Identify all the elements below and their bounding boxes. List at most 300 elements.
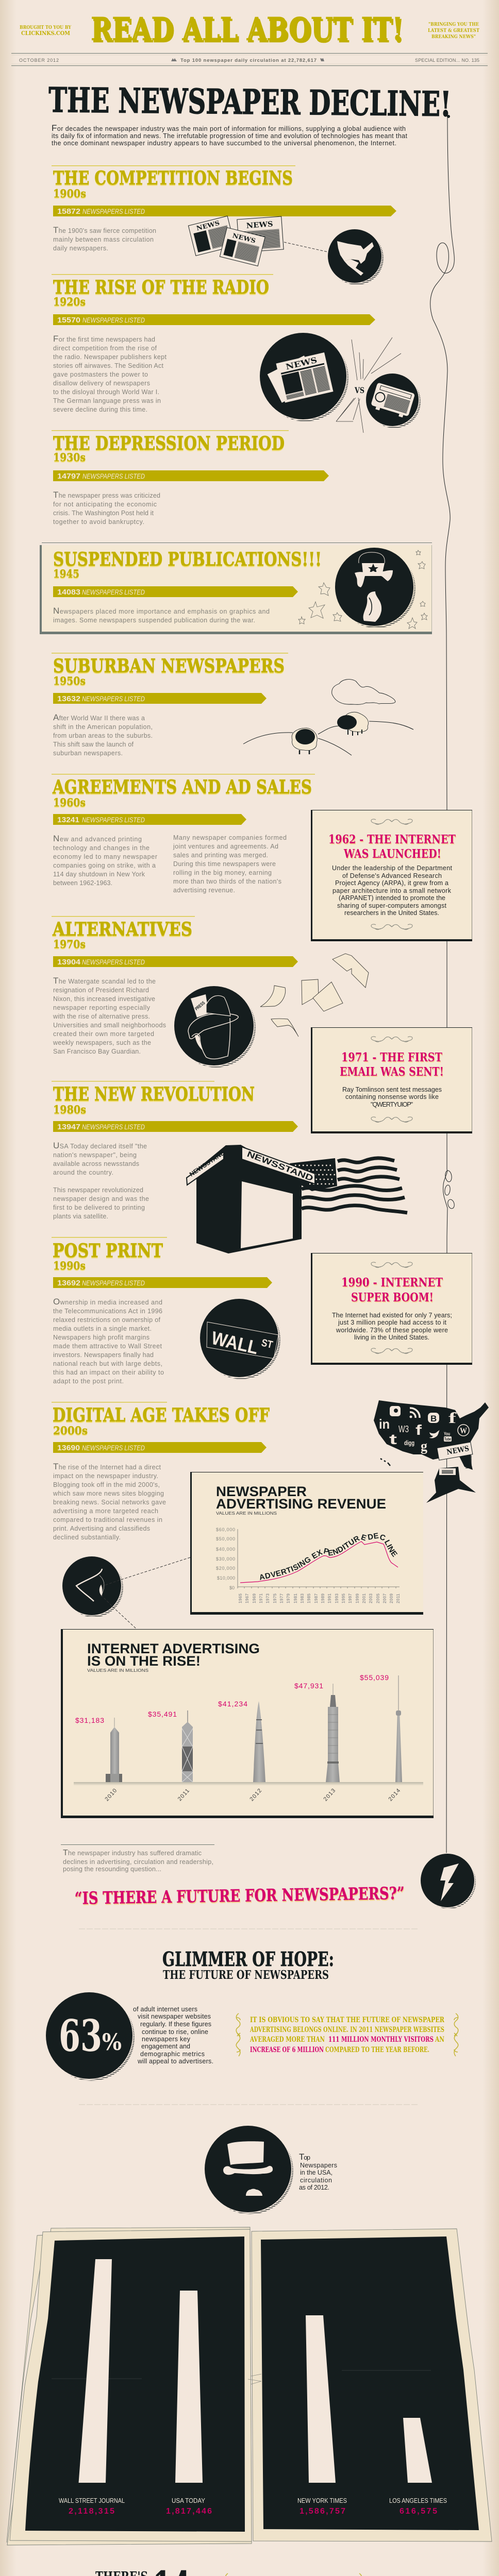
heading — [328, 833, 456, 861]
closing text: declines in advertising, circulation and readership, — [63, 1858, 213, 1866]
text: adult internet users: demographic metrics — [140, 2050, 205, 2058]
body text: declined substantially. — [53, 1534, 121, 1541]
body text: Under the leadership of the Department — [332, 865, 453, 872]
body text: together to avoid bankruptcy. — [53, 518, 144, 526]
section: agreements and ad sales — [52, 774, 315, 894]
brought to you by: BROUGHT TO YOU BY — [20, 25, 71, 30]
icon: newsstand: NEWSSTAND — [188, 1149, 226, 1178]
icon: newspaper circle: NEWS — [285, 355, 318, 371]
date line: OCTOBER 2012 — [19, 58, 59, 63]
count bar: 15872 — [57, 207, 80, 216]
count bar — [53, 956, 298, 967]
body text: resignation of President Richard — [53, 987, 149, 994]
body text: Project Agency (ARPA), it grew from a — [335, 879, 448, 887]
body text — [53, 490, 160, 526]
body text column one: New and advanced printing — [53, 834, 142, 843]
body text: direct competition from the rise of — [53, 345, 157, 352]
icon: usa social media map: W3 — [398, 1424, 409, 1434]
text: adult internet users: engagement and — [141, 2043, 190, 2050]
decade: 1950s — [53, 674, 86, 687]
icon: usa social media map: You — [444, 1431, 450, 1436]
section: digital age takes off — [6, 1400, 492, 2576]
icon: usa social media map: Tube — [444, 1437, 451, 1442]
body text: plants via satellite. — [53, 1213, 108, 1220]
body text: Nixon, this increased investigative — [53, 995, 155, 1003]
heading: DIGITAL AGE TAKES OFF — [53, 1404, 270, 1426]
ornament — [371, 1262, 412, 1267]
icon: reporter circle — [173, 985, 256, 1067]
count bar: NEWSPAPERS LISTED — [82, 1123, 145, 1131]
body text: relaxed restrictions on ownership of — [53, 1316, 161, 1324]
body text: nation's newspaper", being — [53, 1151, 137, 1159]
chart title — [87, 1641, 260, 1673]
icon: wall st circle: WALL — [209, 1327, 260, 1358]
back pages — [7, 2227, 492, 2545]
year labels — [104, 1787, 402, 1803]
count bar: 13947 — [57, 1123, 80, 1131]
icon: uncle sam circle — [334, 547, 415, 628]
line chart: 1967 — [245, 1593, 250, 1603]
body text — [53, 1141, 149, 1220]
icon: wall st circle — [199, 1298, 280, 1379]
question heading: “IS THERE A FUTURE FOR NEWSPAPERS?” — [75, 1883, 405, 1908]
icon: american flag — [290, 1158, 407, 1213]
chart title: VALUES ARE IN MILLIONS — [87, 1668, 148, 1673]
year labels: 2011 — [177, 1787, 191, 1802]
section: alternatives — [52, 916, 369, 1067]
heading: SUBURBAN NEWSPAPERS — [53, 655, 285, 677]
body text: mainly between mass circulation — [53, 236, 154, 243]
body text: newspaper design and was the — [53, 1195, 149, 1202]
right page panel — [261, 2236, 479, 2530]
body text: The 1900's saw fierce competition — [53, 225, 156, 235]
decade: 1980s — [53, 1103, 86, 1116]
body text: The rise of the Internet had a direct — [53, 1462, 161, 1471]
body text: weekly newspapers, such as the — [53, 1039, 151, 1046]
body text: containing nonsense words like — [345, 1093, 439, 1100]
callout: future of advertising: IT IS OBVIOUS TO SAY THAT THE FUTURE OF NEWSPAPER — [250, 2016, 445, 2024]
count bar — [53, 470, 329, 481]
body text: which saw more news sites blogging — [53, 1490, 164, 1497]
line chart: 2005 — [376, 1593, 380, 1603]
body text — [53, 713, 153, 757]
line chart: 2009 — [389, 1593, 394, 1603]
chart title — [216, 1484, 386, 1516]
decade: 1930s — [53, 451, 86, 464]
icon: usa social media map: g — [421, 1438, 427, 1454]
line chart: 1973 — [265, 1593, 270, 1603]
heading: THE NEW REVOLUTION — [53, 1083, 255, 1105]
count bar: 13241 — [57, 816, 79, 824]
body text — [53, 225, 156, 252]
body text: Newspapers placed more importance and emphasis on graphics and — [53, 606, 270, 616]
line chart: 2007 — [382, 1593, 387, 1603]
line chart: 1971 — [259, 1593, 263, 1603]
bar: wall street journal: WALL STREET JOURNAL — [59, 2497, 125, 2504]
icon: cloud — [332, 680, 395, 704]
tower: 2011: $35,491 — [148, 1710, 177, 1718]
panel: suspended publications — [40, 543, 432, 634]
count bar: NEWSPAPERS LISTED — [82, 1279, 145, 1287]
bar: los angeles times — [389, 2418, 447, 2516]
heading: glimmer of hope — [162, 1947, 334, 1982]
callout: number of newspapers — [225, 2573, 362, 2576]
body text — [332, 1312, 452, 1341]
heading: THE RISE OF THE RADIO — [53, 277, 269, 298]
icon: wall st circle: ST — [260, 1337, 274, 1351]
section: the depression period — [52, 430, 329, 526]
body text: disallow delivery of newspapers — [53, 380, 150, 387]
tower: 2013 — [294, 1682, 340, 1782]
body text column one: 114 day shutdown in New York — [53, 871, 145, 878]
heading: 1990 - INTERNET — [341, 1276, 443, 1290]
icon: megaphone circle — [62, 1556, 123, 1617]
section: post print — [52, 1237, 280, 1385]
tower: 2011 — [148, 1710, 193, 1782]
decade: 1900s — [53, 187, 86, 200]
body text: advertising a more targeted reach — [53, 1507, 158, 1515]
count bar: NEWSPAPERS LISTED — [82, 695, 145, 703]
body text: newspaper reporting especially — [53, 1004, 151, 1011]
line chart: 1985 — [307, 1593, 311, 1603]
section: the competition begins — [52, 165, 396, 285]
body text: "QWERTYUIOP" — [371, 1101, 413, 1108]
closing text: The newspaper industry has suffered dramatic — [63, 1849, 202, 1857]
panel: 1990 internet super boom — [311, 1253, 472, 1365]
icon: 63 percent circle: 63 — [59, 2010, 102, 2061]
body text: severe decline during this time. — [53, 406, 147, 413]
text: top newspapers: Newspapers — [300, 2162, 337, 2169]
heading: glimmer of hope: THE FUTURE OF NEWSPAPERS — [163, 1968, 329, 1982]
body text column one: companies going on strike, with a — [53, 862, 156, 869]
icon: flying papers — [260, 954, 369, 1037]
count bar — [53, 314, 375, 325]
line chart: 1995 — [341, 1593, 346, 1603]
body text column one: economy led to many newspaper — [53, 853, 157, 860]
text: top newspapers: circulation — [300, 2177, 332, 2184]
text: adult internet users: continue to rise, online — [142, 2028, 208, 2036]
body text: researchers in the United States. — [344, 909, 439, 917]
icon: usa social media map: in — [379, 1416, 390, 1432]
line chart: $40,000 — [216, 1547, 235, 1552]
text: adult internet users: newspapers key — [142, 2036, 191, 2043]
body text — [53, 1462, 166, 1541]
callout: future of advertising: 111 MILLION MONTHLY VISITORS — [328, 2036, 434, 2044]
body text: San Francisco Bay Guardian. — [53, 1048, 141, 1055]
body text: The Watergate scandal led to the — [53, 976, 156, 986]
heading: 1971 - THE FIRST — [341, 1050, 442, 1064]
bar: los angeles times: LOS ANGELES TIMES — [389, 2497, 447, 2504]
brought to you by: CLICKINKS.COM — [21, 30, 70, 37]
count bar — [53, 586, 298, 597]
count bar: NEWSPAPERS LISTED — [82, 208, 145, 215]
line chart: 1975 — [273, 1593, 277, 1603]
icon: usa social media map: f — [415, 1422, 422, 1438]
body text — [53, 1297, 164, 1385]
ornament — [371, 1348, 412, 1353]
decade: 2000s — [53, 1424, 88, 1437]
body text: living in the United States. — [354, 1334, 429, 1341]
body text: This shift saw the launch of — [53, 741, 134, 748]
body text: shift in the American population, — [53, 723, 153, 731]
bar: new york times: 1,586,757 — [300, 2507, 345, 2516]
count bar — [53, 814, 246, 825]
decade: 1990s — [53, 1259, 86, 1272]
heading: THE DEPRESSION PERIOD — [53, 433, 285, 454]
body text column one — [53, 834, 157, 887]
body text: to the disloyal through World War I. — [53, 388, 159, 396]
icon: usa social media map: t — [389, 1431, 397, 1447]
heading — [341, 1276, 443, 1304]
icon: usa social media map: W — [460, 1427, 467, 1435]
body text: for not anticipating the economic — [53, 501, 157, 508]
panel: 1971 first email — [311, 1027, 472, 1133]
line chart: 1981 — [293, 1593, 298, 1603]
body text: suburban newspapers. — [53, 750, 123, 757]
line chart: 1977 — [279, 1593, 284, 1603]
body text: Ownership in media increased and — [53, 1297, 162, 1307]
line chart: 1983 — [300, 1593, 305, 1603]
line chart: 1989 — [321, 1593, 325, 1603]
intro text: For decades the newspaper industry was the main port of information for millions, supplying a global audience with — [52, 123, 406, 133]
count bar: NEWSPAPERS LISTED — [82, 958, 145, 966]
decade: 1960s — [53, 796, 86, 809]
statistic: 14 percent decline — [95, 2562, 209, 2576]
circulation strip: Top 100 newspaper daily circulation at 22,782,617 — [180, 58, 317, 63]
body text: available across newsstands — [53, 1160, 139, 1167]
icon: lightning circle — [420, 1853, 476, 1909]
edition: SPECIAL EDITION... NO. 135 — [415, 58, 479, 63]
ornament — [371, 1037, 412, 1042]
line chart: 1979 — [286, 1593, 291, 1603]
count bar — [53, 206, 396, 216]
body text column two: advertising revenue. — [173, 887, 235, 894]
bar: usa today: 1,817,446 — [166, 2507, 212, 2516]
heading: ALTERNATIVES — [52, 919, 192, 940]
tower: 2010: $31,183 — [75, 1716, 104, 1724]
body text column one: between 1962-1963. — [53, 879, 112, 887]
body text: media outlets in a single market. — [53, 1325, 152, 1332]
decade: 1920s — [53, 295, 86, 308]
body text: with the rise of alternative press. — [53, 1013, 150, 1020]
body text: print. Advertising and classifieds — [53, 1525, 150, 1532]
masthead title: READ ALL ABOUT IT! — [91, 10, 403, 48]
body text: the Telecommunications Act in 1996 — [53, 1308, 162, 1315]
count bar — [53, 1277, 272, 1288]
icon: reporter circle: PRESS — [194, 1000, 206, 1011]
tower: 2014: $55,039 — [360, 1673, 389, 1682]
line chart: 1965 — [238, 1593, 243, 1603]
body text: investors. Newspapers finally had — [53, 1351, 154, 1359]
line chart: $20,000 — [216, 1566, 235, 1571]
count bar: NEWSPAPERS LISTED — [82, 1444, 145, 1452]
icon: newspaper circle — [259, 332, 348, 421]
count bar: 13904 — [57, 958, 81, 967]
line chart — [216, 1527, 401, 1603]
year labels: 2014 — [387, 1787, 402, 1803]
count bar: NEWSPAPERS LISTED — [82, 316, 145, 324]
body text column two: Many newspaper companies formed — [173, 834, 287, 841]
text: top newspapers: in the USA, — [300, 2169, 332, 2176]
arrow: dashed connectors — [101, 1557, 190, 1629]
body text: of Defense's Advanced Research — [342, 872, 442, 879]
bar: new york times — [297, 2315, 347, 2516]
bar: usa today — [166, 2291, 212, 2516]
body text: USA Today declared itself "the — [53, 1141, 147, 1150]
section: the rise of the radio — [52, 274, 421, 433]
intro text: its daily fix of information and news. The irrefutable progression of time and evolution of technologies has meant that — [52, 132, 408, 140]
tower: 2014 — [360, 1673, 402, 1782]
closing text: posing the resounding question... — [63, 1866, 161, 1873]
year labels: 2012 — [248, 1787, 263, 1803]
count bar: 13690 — [57, 1444, 80, 1452]
line chart: $30,000 — [216, 1556, 235, 1562]
body text: this had an impact on their ability to — [53, 1369, 164, 1376]
text: adult internet users: regularly. If these figures — [140, 2021, 211, 2028]
text: top newspapers: Top — [299, 2152, 310, 2162]
body text: The German language press was in — [53, 397, 161, 404]
icon: newsstand — [187, 1145, 315, 1253]
slogan: BREAKING NEWS" — [431, 34, 476, 40]
heading: EMAIL WAS SENT! — [340, 1065, 444, 1079]
callout: future of advertising: COMPARED TO THE YEAR BEFORE. — [325, 2046, 429, 2054]
body text: worldwide. 73% of these people were — [336, 1327, 448, 1334]
icon: usa social media map — [374, 1400, 489, 1503]
body text: images. Some newspapers suspended publication during the war. — [53, 617, 255, 624]
line chart: $50,000 — [216, 1536, 235, 1541]
body text: adapt to the post print. — [53, 1378, 124, 1385]
icon: globe with usa — [327, 229, 384, 285]
label: vs with burst lines — [336, 337, 401, 433]
decade: 1970s — [53, 938, 86, 951]
count bar — [53, 1442, 267, 1453]
body text: just 3 million people had access to it — [338, 1319, 447, 1326]
line chart: 2003 — [369, 1593, 373, 1603]
text: top newspapers — [299, 2152, 337, 2191]
brought to you by — [20, 25, 71, 37]
body text: Blogging took off in the mid 2000's, — [53, 1481, 160, 1488]
body text: created their own more targeted — [53, 1030, 154, 1038]
connecting string — [430, 116, 455, 1854]
body text: compared to traditional revenues in — [53, 1516, 162, 1523]
line chart: 1999 — [355, 1593, 360, 1603]
heading: 1962 - THE INTERNET — [328, 833, 456, 846]
icon: stack of newspapers — [188, 216, 328, 266]
bar: usa today: USA TODAY — [172, 2497, 205, 2504]
icon: usa social media map: B — [430, 1414, 437, 1423]
count bar: 13632 — [57, 694, 80, 703]
count bar: 14083 — [57, 588, 80, 597]
body text: After World War II there was a — [53, 713, 145, 722]
slogan: LATEST & GREATEST — [428, 28, 479, 33]
icon: top hat circle — [204, 2125, 293, 2214]
body text: breaking news. Social networks gave — [53, 1499, 166, 1506]
heading: SUPER BOOM! — [351, 1291, 434, 1304]
body text: gave postmasters the power to — [53, 371, 148, 378]
body text: from urban areas to the suburbs. — [53, 732, 153, 739]
bar: wall street journal — [59, 2259, 125, 2516]
icon: usa social media map: NEWS — [446, 1445, 470, 1456]
body text: paper architecture into a small network — [332, 887, 452, 894]
chart title: ADVERTISING REVENUE — [216, 1496, 386, 1512]
text: top newspapers: as of 2012. — [299, 2184, 329, 2191]
heading: SUSPENDED PUBLICATIONS!!! — [53, 549, 322, 570]
count bar: NEWSPAPERS LISTED — [82, 588, 145, 596]
body text — [53, 606, 270, 624]
callout: future of advertising: AN — [435, 2036, 444, 2044]
icon: stack of newspapers: NEWS — [195, 219, 220, 232]
tower: 2012 — [218, 1700, 265, 1782]
icon: stars — [298, 550, 427, 629]
body text — [342, 1086, 442, 1108]
body text: crisis. The Washington Post held it — [53, 510, 154, 517]
callout: future of advertising: INCREASE OF 6 MILLION — [250, 2046, 324, 2054]
text: adult internet users — [133, 2006, 213, 2065]
heading: glimmer of hope: GLIMMER OF HOPE: — [162, 1947, 334, 1971]
count bar: 14797 — [57, 472, 80, 481]
heading — [340, 1050, 444, 1079]
body text column two: rolling in the big money, earning — [173, 869, 272, 876]
bar: new york times: NEW YORK TIMES — [297, 2497, 347, 2504]
icon: 63 percent circle: % — [102, 2029, 122, 2056]
line chart: 2001 — [362, 1593, 367, 1603]
icon: usa social media map: digg — [404, 1439, 414, 1447]
text: adult internet users: of adult internet users — [133, 2006, 197, 2013]
body text: daily newspapers. — [53, 245, 108, 252]
line chart: 1993 — [335, 1593, 339, 1603]
ornament — [371, 924, 412, 929]
callout: future of advertising — [236, 2013, 458, 2056]
body text column two: sales and printing was merged. — [173, 852, 268, 859]
decade: 1945 — [53, 567, 79, 580]
body text: made them attractive to Wall Street — [53, 1343, 162, 1350]
heading: POST PRINT — [53, 1240, 163, 1262]
icon: usa social media map: f — [448, 1410, 457, 1427]
body text: Newspapers high profit margins — [53, 1334, 149, 1341]
body text column two — [173, 834, 287, 894]
year labels: 2013 — [322, 1787, 337, 1803]
closing text — [61, 1844, 214, 1873]
masthead — [11, 10, 488, 66]
line chart: $60,000 — [216, 1527, 235, 1532]
chart title: INTERNET ADVERTISING — [87, 1641, 260, 1656]
bar: wall street journal: 2,118,315 — [69, 2507, 114, 2516]
icon: newsstand: NEWSSTAND — [246, 1150, 314, 1183]
intro text: the once dominant newspaper industry appears to have succumbed to the universal phenomenon, the Internet. — [52, 140, 396, 147]
text: adult internet users: visit newspaper websites — [138, 2013, 211, 2020]
count bar: 15570 — [57, 316, 80, 325]
intro text — [52, 123, 408, 147]
tower: 2010 — [75, 1716, 122, 1782]
callout: future of advertising: AVERAGED MORE THAN — [250, 2036, 325, 2044]
year labels: 2010 — [104, 1787, 119, 1803]
panel: advertising revenue chart — [190, 1472, 423, 1615]
icon: radio circle — [365, 373, 421, 428]
slogan — [428, 22, 479, 40]
count bar: NEWSPAPERS LISTED — [82, 816, 145, 824]
body text: For the first time newspapers had — [53, 334, 155, 344]
heading: THE COMPETITION BEGINS — [53, 167, 293, 189]
bar: los angeles times: 616,575 — [400, 2507, 437, 2516]
body text: The newspaper press was criticized — [53, 490, 160, 500]
section: the new revolution — [52, 1081, 407, 1253]
line chart: $0 — [229, 1585, 235, 1590]
chart title: NEWSPAPER — [216, 1484, 307, 1499]
body text column one: technology and changes in the — [53, 844, 149, 852]
body text — [53, 976, 166, 1055]
line chart: 1969 — [252, 1593, 257, 1603]
line chart: 1997 — [348, 1593, 353, 1603]
